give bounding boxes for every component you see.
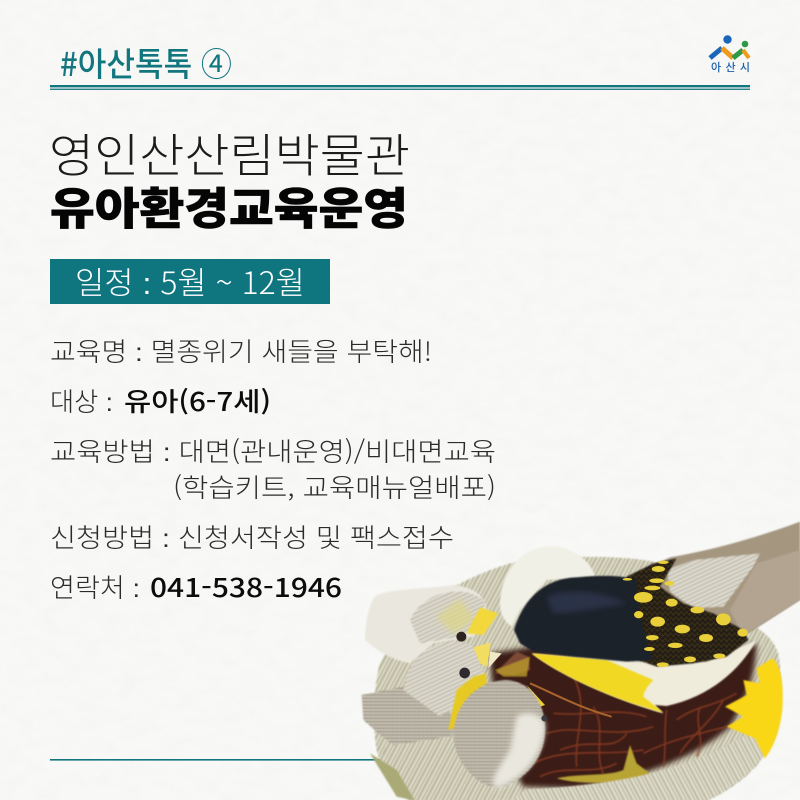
- info: target: 대상 :: [50, 382, 113, 419]
- header tag: #아산톡톡 ④: #아산톡톡 ④: [60, 38, 232, 86]
- dandelion: [725, 658, 783, 758]
- chick: front: [453, 680, 547, 788]
- nest: [370, 557, 781, 800]
- yellow spots: [623, 561, 748, 667]
- info: how to apply: 신청방법 : 신청서작성 및 팩스접수: [50, 518, 454, 555]
- bottom rule: [50, 759, 380, 761]
- title line 2: 유아환경교육운영: [50, 173, 408, 237]
- logo: Asan city: [710, 35, 750, 75]
- parent bird: black head: [514, 576, 653, 662]
- photo: birds in a nest: [362, 522, 800, 800]
- info: method: 교육방법 : 대면(관내운영)/비대면교육: [50, 432, 496, 469]
- header double rule: [50, 85, 750, 90]
- info: contact: 연락처 :: [50, 568, 140, 605]
- chick: lower left: [362, 641, 530, 745]
- egg: [500, 546, 595, 627]
- parent bird: belly: [532, 640, 757, 713]
- info: target: [50, 382, 271, 419]
- info: contact: [50, 568, 342, 605]
- info: program name: 교육명 : 멸종위기 새들을 부탁해!: [50, 332, 432, 369]
- title line 1: 영인산산림박물관: [49, 120, 410, 186]
- parent bird: spotted wing: [620, 558, 748, 667]
- parent bird: tail feathers: [637, 522, 800, 637]
- info: contact: 041-538-1946: [150, 568, 342, 605]
- chick: upper: [365, 585, 498, 663]
- schedule badge: 일정 : 5월 ~ 12월: [75, 258, 305, 303]
- info: method: [50, 432, 496, 505]
- info: target: 유아(6-7세): [124, 382, 271, 419]
- logo: Asan city: 아산시: [711, 59, 750, 75]
- info: method: (학습키트, 교육매뉴얼배포): [173, 468, 496, 505]
